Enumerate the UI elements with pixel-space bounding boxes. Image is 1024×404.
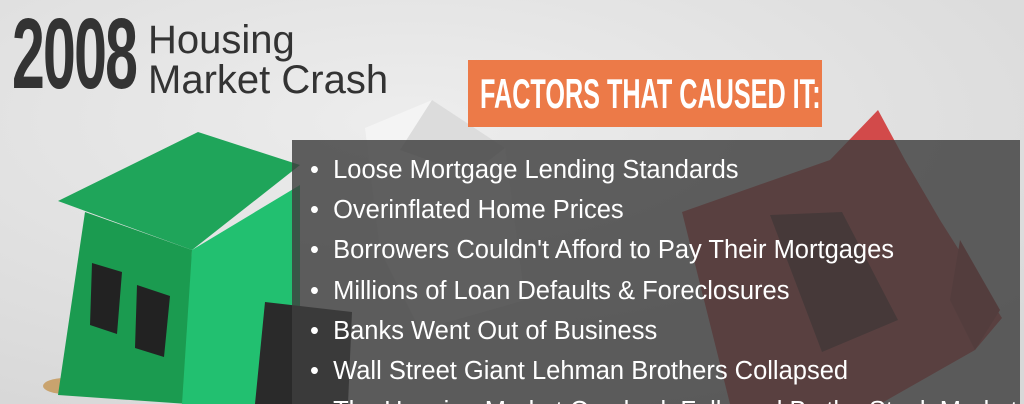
- title: subtitle: [148, 18, 388, 102]
- heading: factors banner: [468, 60, 822, 127]
- panel: factors list: • Banks Went Out of Business: [310, 317, 657, 345]
- title: [12, 0, 388, 110]
- panel: factors list: • Loose Mortgage Lending Standards: [310, 156, 739, 184]
- panel: factors list: • Wall Street Giant Lehman Brothers Collapsed: [310, 357, 848, 385]
- icon: coin: [43, 378, 87, 394]
- panel: factors list: • Millions of Loan Defaults & Foreclosures: [310, 277, 789, 305]
- title: year: 2008: [12, 0, 136, 110]
- icon: green house: [58, 132, 352, 404]
- panel: factors list: • Overinflated Home Prices: [310, 196, 624, 224]
- icon: white house: [365, 100, 525, 330]
- panel: factors list: • Borrowers Couldn't Afford to Pay Their Mortgages: [310, 236, 894, 264]
- icon: red house: [682, 110, 1002, 404]
- title: subtitle: Housing: [148, 18, 295, 62]
- title: subtitle: Market Crash: [148, 58, 388, 102]
- panel: factors list: [292, 140, 1020, 404]
- heading: factors banner: FACTORS THAT CAUSED IT:: [480, 70, 821, 117]
